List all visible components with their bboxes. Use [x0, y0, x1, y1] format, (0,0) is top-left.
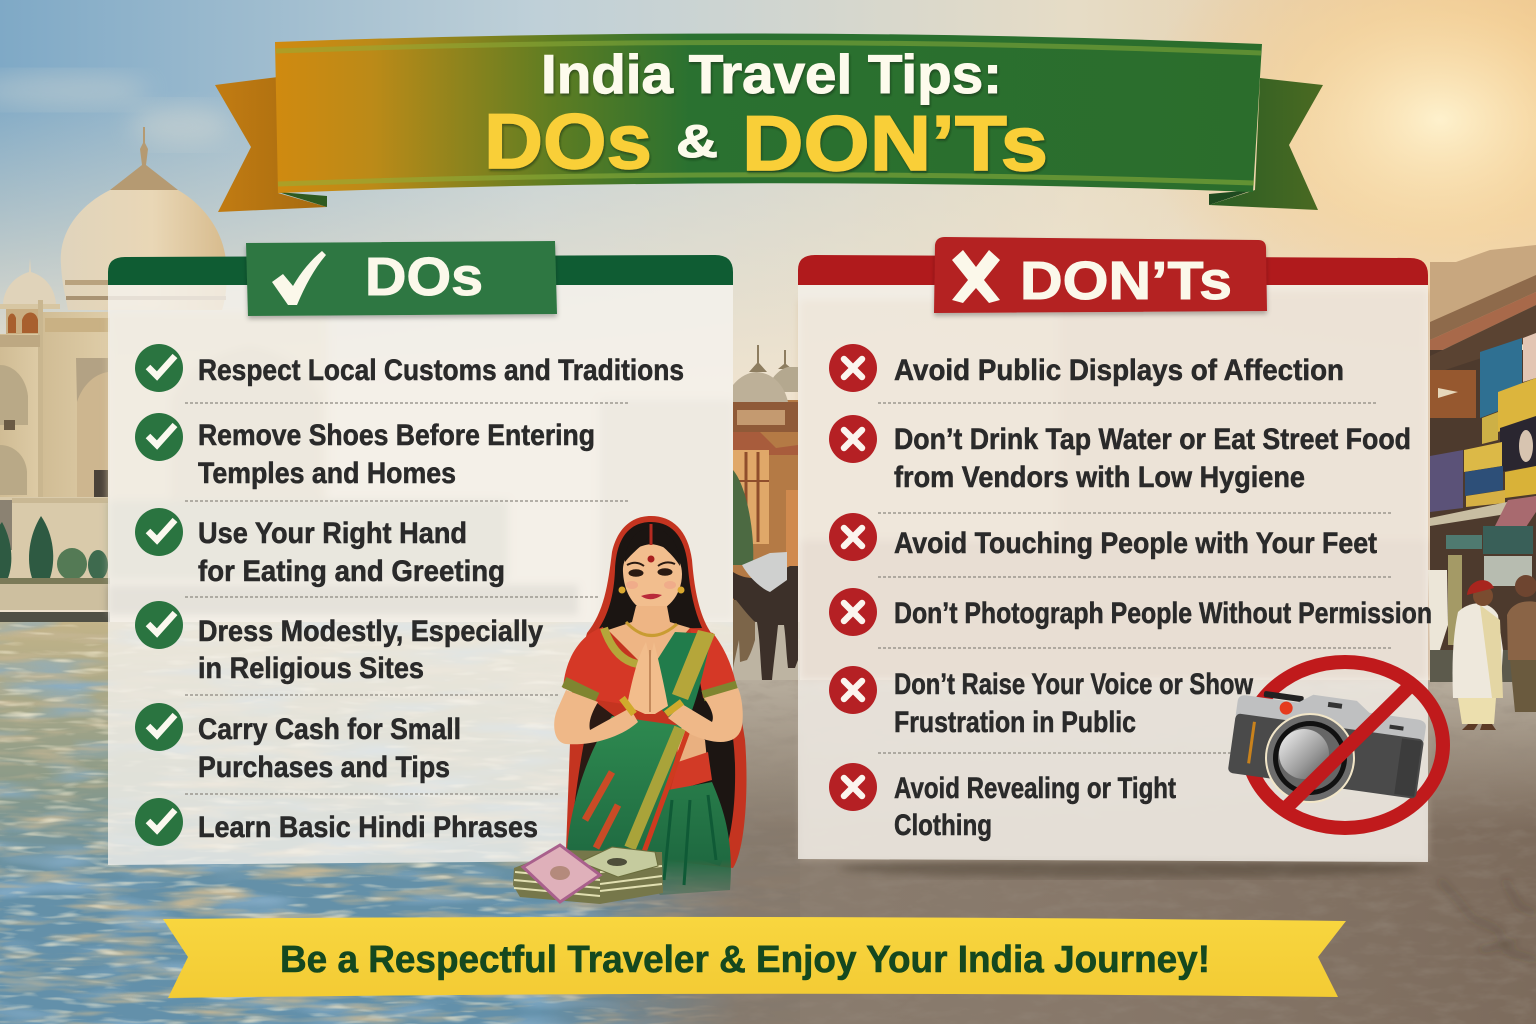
item: photograph: Don’t Photograph People Without Permission — [894, 597, 1432, 630]
icon: check mark — [272, 251, 326, 305]
faint buildings behind panels — [108, 290, 1428, 860]
item: carry cash: Purchases and Tips — [198, 751, 450, 784]
illustration: money stack — [513, 845, 663, 904]
main ribbon — [275, 33, 1262, 193]
item: dress modestly — [135, 601, 543, 685]
item: feet: Avoid Touching People with Your Feet — [894, 527, 1377, 560]
illustration: market buildings — [1430, 245, 1536, 682]
item: tap water: Don’t Drink Tap Water or Eat Street Food — [894, 423, 1411, 456]
top bar — [798, 255, 1428, 285]
neck and chest — [608, 606, 690, 672]
footer text: Be a Respectful Traveler & Enjoy Your India Journey! — [280, 939, 1210, 981]
title line 2: DOs: DOs — [484, 97, 652, 185]
item: learn hindi — [135, 798, 538, 846]
item: tap water: from Vendors with Low Hygiene — [894, 461, 1305, 494]
item: feet — [829, 513, 1377, 561]
blouse — [563, 627, 640, 705]
waist — [676, 720, 708, 772]
item: clothing: Clothing — [894, 809, 992, 842]
panel background — [798, 285, 1428, 862]
item: clothing: Avoid Revealing or Tight — [894, 772, 1176, 805]
title line 2: DON'Ts: DON’Ts — [742, 99, 1048, 187]
title banner — [215, 33, 1323, 212]
footer banner — [163, 917, 1346, 998]
hair — [598, 522, 702, 630]
item: public affection — [829, 344, 1344, 392]
item: raise voice: Don’t Raise Your Voice or Show — [894, 668, 1254, 701]
ribbon fold right — [1209, 190, 1253, 205]
item: learn hindi: Learn Basic Hindi Phrases — [198, 811, 538, 844]
face — [623, 544, 682, 612]
panel: DOs — [108, 241, 733, 865]
item: clothing — [829, 763, 1176, 842]
heading tab: DOs — [246, 241, 557, 316]
item: right hand: Use Your Right Hand — [198, 517, 467, 550]
item: dress modestly: in Religious Sites — [198, 652, 424, 685]
illustration: street — [540, 680, 1536, 1024]
long hair on right — [680, 640, 735, 866]
item: right hand — [135, 508, 505, 588]
item: remove shoes: Remove Shoes Before Entering — [198, 419, 595, 452]
panel: DON'Ts — [798, 237, 1432, 862]
main facade — [0, 334, 45, 499]
title line 1: India Travel Tips: — [541, 43, 1002, 105]
ribbon fold left — [278, 192, 327, 207]
illustration: street people — [1428, 570, 1536, 730]
item: dress modestly: Dress Modestly, Especially — [198, 615, 543, 648]
item: tap water — [829, 415, 1411, 494]
illustration: Taj Mahal — [0, 127, 227, 623]
item: respect customs — [135, 344, 684, 392]
item: remove shoes: Temples and Homes — [198, 457, 456, 490]
panel background — [108, 285, 733, 865]
left ribbon tail — [215, 77, 327, 212]
top bar — [108, 255, 733, 285]
skirt — [567, 716, 731, 895]
item: photograph — [829, 588, 1432, 636]
illustration: woman in sari — [554, 516, 746, 895]
item: raise voice: Frustration in Public — [894, 706, 1136, 739]
hands namaste — [627, 642, 668, 714]
illustration: horse — [733, 552, 798, 680]
item: carry cash: Carry Cash for Small — [198, 713, 461, 746]
icon: no photography camera — [1228, 662, 1443, 828]
heading tab: DON'Ts — [934, 237, 1267, 313]
finial and dome — [110, 127, 178, 190]
item: carry cash — [135, 703, 461, 784]
prohibition ring — [1247, 662, 1443, 828]
illustration: distant palace — [733, 345, 798, 680]
item: respect customs: Respect Local Customs and Traditions — [198, 354, 684, 387]
heading text: DON’Ts — [1020, 251, 1232, 311]
icon: X mark — [952, 250, 1000, 303]
right ribbon tail — [1209, 78, 1323, 210]
illustration: river — [0, 622, 800, 1024]
slash — [1287, 683, 1413, 807]
lens — [1266, 714, 1354, 802]
sari drape — [652, 632, 712, 730]
cypress trees — [0, 516, 108, 580]
heading text: DOs — [365, 247, 483, 307]
side chattri — [3, 258, 56, 304]
item: raise voice — [829, 666, 1254, 739]
item: remove shoes — [135, 413, 595, 490]
veil — [566, 516, 746, 868]
item: public affection: Avoid Public Displays of Affection — [894, 354, 1344, 387]
title ampersand: & — [676, 115, 718, 167]
arms — [554, 690, 638, 744]
item: right hand: for Eating and Greeting — [198, 555, 505, 588]
camera body — [1228, 684, 1428, 799]
